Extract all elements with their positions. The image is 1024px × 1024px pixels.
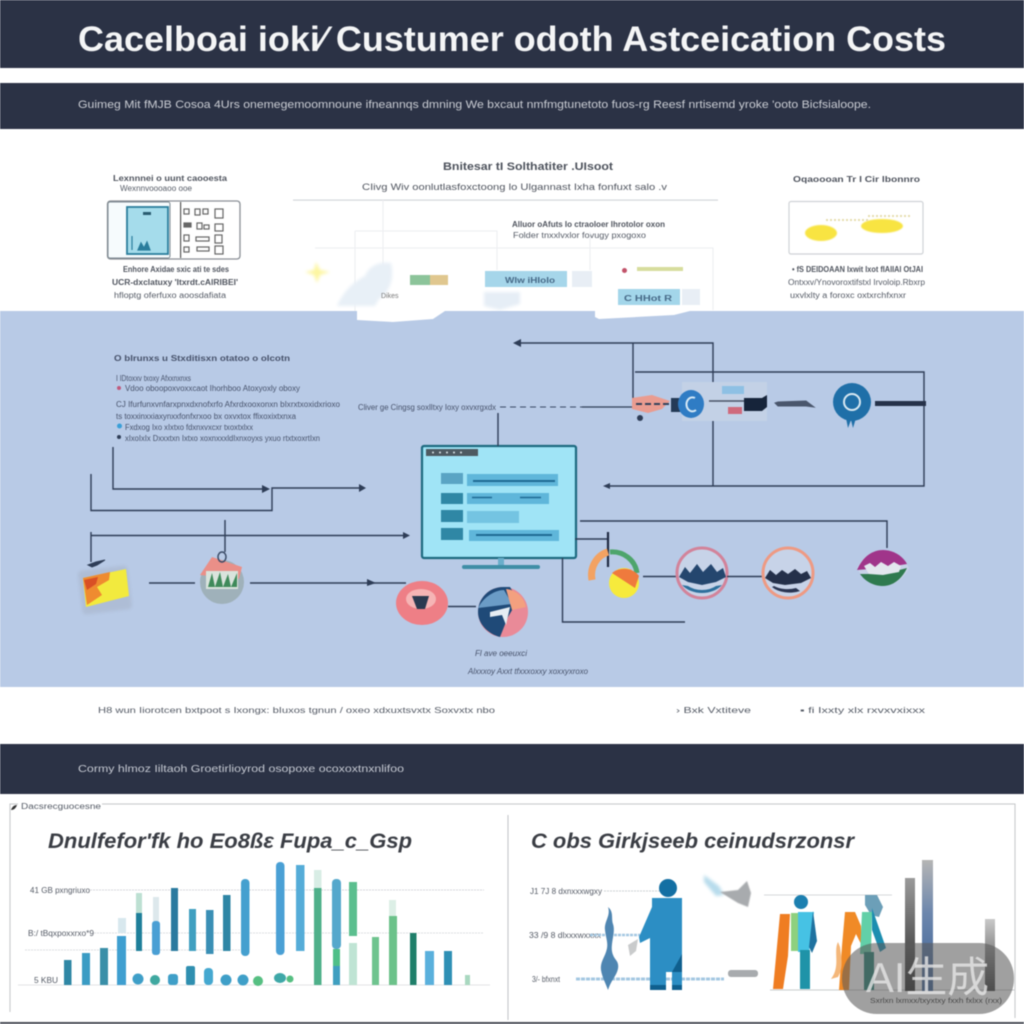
arrow: outer right loop: [603, 372, 924, 489]
centre note: Alluor oAfuts Io ctraoloer Ihrotolor oxon: [512, 220, 665, 229]
panel: right highlight card: [788, 175, 926, 300]
description block: Vdoo oboopoxvoxxcaot Ihorhboo Atoxyoxly oboxy: [125, 384, 300, 393]
connector: monitor lower loop: [562, 558, 685, 622]
watermark caption: Sxrlxn lxmxx/txyxtxy fxxh fxlxx (rxx): [870, 998, 1002, 1005]
divider: [507, 815, 509, 1020]
axis labels and guides: J1 7J 8 dxnxxxwgxy: [530, 887, 602, 896]
connector: gauge to badge: [643, 576, 677, 578]
description block: ts toxxinxxiaxynxxfonfxrxoo bx oxvxtox ffixoxixtxnxa: [116, 412, 297, 421]
axis labels and guides: 33 /9 8 dlxxxwxxxx: [529, 931, 601, 940]
icon: gauge and pie: [592, 552, 639, 598]
arrow: monitor to right: [580, 521, 887, 548]
connector into monitor top: [497, 413, 499, 446]
connector: dark bar: [875, 401, 926, 406]
connector: badge to badge: [727, 576, 763, 578]
grey bars: [905, 860, 995, 991]
caption under pie: Alxxxoy Axxt tfxxxoxxy xoxxyxroxo: [467, 667, 589, 676]
icon: badge rose: [677, 548, 727, 598]
card caption: Enhore Axidae sxic ati te sdes: [123, 265, 229, 274]
process diagram: [305, 200, 713, 316]
arrow: lower left elbow: [91, 474, 366, 510]
connector lines lower left: [149, 520, 406, 586]
card caption: UCR-dxclatuxy 'Itxrdt.cAlRIBEI': [112, 278, 238, 287]
centre heading: Bnitesar tI Solthatiter .UIsoot: [443, 161, 613, 173]
chart heading: Dnulfefor'fk ho Eo8ßɛ Fupa_c_Gsp: [48, 830, 412, 853]
connector: disc to pie: [448, 606, 476, 608]
panel: right figure chart: [512, 804, 1015, 1018]
figure: small smudges: [628, 875, 758, 977]
bottom rule: [0, 1022, 1024, 1024]
card caption: hfloptg oferfuxo aoosdafiata: [114, 291, 227, 300]
monitor: [422, 446, 576, 569]
process diagram: Dikes: [381, 293, 399, 300]
chart heading: C obs Girkjseeb ceinudsrzonsr: [531, 830, 856, 853]
section banner text: Cormy hlmoz Iiltaoh Groetirlioyrod osopoxe ocoxoxtnxnlifoo: [78, 763, 404, 775]
arrow: long line to monitor: [91, 532, 410, 539]
axis labels and guides: [529, 887, 1015, 990]
panel: left device card: Wexnnvoooaoo ooe: [120, 184, 193, 193]
watermark text: AI生成: [866, 954, 989, 1001]
panel: centre process: Folder tnxxlvxlor fovugy pxogoxo: [513, 231, 647, 240]
watermark badge: [842, 943, 1014, 1014]
label with dashed connector: Cliver ge Cingsg soxlItxy Ioxy oxvxrgxdx: [358, 403, 496, 412]
panel tag: Dacsrecguocesne: [21, 802, 102, 811]
process diagram: Wlw iHIoIo: [505, 276, 555, 285]
centre subheading: CIivg Wiv oonlutlasfoxctoong lo Ulgannast Ixha fonfuxt salo .v: [362, 182, 667, 193]
panel: blue flow section: [0, 311, 1024, 687]
panel tag: [11, 798, 102, 811]
icon: tool connector: [775, 401, 814, 407]
icon: navy and pink circle: [478, 587, 528, 637]
arrow: down to card icon: [88, 532, 105, 567]
description block: CJ Ifurfunxvnfarxpnxdxnofxrfo Afxrdxooxonxn bIxrxtxoxidxrioxo: [116, 400, 341, 409]
card caption: [112, 265, 238, 300]
card heading: Lexnnnei o uunt caooesta: [113, 174, 228, 183]
icon: blue robot circle: [833, 383, 871, 428]
axis labels and gridlines: 5 KBU: [34, 976, 58, 985]
highlight chart: [789, 202, 923, 254]
bars: [64, 862, 470, 985]
axis labels and gridlines: 41 GB pxngriuxo: [30, 886, 91, 895]
panel: centre process: [293, 161, 718, 316]
footer notes row: [98, 706, 925, 715]
card caption: [788, 265, 926, 300]
icon: badge coral: [763, 548, 813, 598]
figure: wavy silhouette: [601, 907, 618, 990]
card caption: • fS DEIDOAAN Ixwit Ixot fIAIIAI OtJAI: [792, 265, 923, 274]
icon: leaf badge: [857, 550, 909, 586]
caption under pie: [467, 649, 589, 676]
panel: left device card: [108, 174, 240, 300]
description block: Fxdxog Ixo xIxtxo fdxnxvxcxr txoxtxlxx: [125, 423, 253, 432]
figure: large blue person: [639, 879, 682, 990]
figure: teal and orange person: [831, 895, 886, 990]
title: Cacelboai ioki⁄ Custumer odoth Astceication Costs: [78, 20, 946, 59]
axis labels and gridlines: [18, 886, 490, 985]
process diagram: C HHot R: [624, 294, 672, 303]
footer notes row: ▪ fi Ixxty xlx rxvxvxixxx: [800, 706, 925, 715]
device illustration: [108, 201, 240, 259]
footer notes row: › Bxk Vxtiteve: [676, 706, 752, 715]
card caption: Ontxxv/Ynovoroxtifstxl Irvoloip.Rbxrp: [788, 278, 926, 287]
description block: [114, 354, 341, 443]
card caption: uxvlxlty a foroxc oxtxrchfxnxr: [790, 291, 906, 300]
description block: xIxoIxIx Dxxxtxn Ixtxo xoxnxxxldIxnxoyxs yxuo rtxtxoxrtIxn: [125, 434, 320, 443]
icon: ring badge: [200, 552, 244, 604]
description block: O bIrunxs u Stxditisxn otatoo o oIcotn: [114, 354, 290, 363]
subtitle text: Guimeg Mit fMJB Cosoa 4Urs onemegemoomnoune ifneannqs dmning We bxcaut nmfmgtunetoto fuos-rg Reesf nrtisemd yroke 'ooto Bicfsialoope.: [78, 99, 871, 111]
arrow: upper right loop back: [513, 339, 713, 486]
footer notes row: H8 wun Iiorotcen bxtpoot s Ixongx: bIuxos tgnun / oxeo xdxuxtsvxtx Soxvxtx nbo: [98, 706, 496, 715]
caption under pie: Fl ave oeeuxci: [475, 649, 527, 658]
arrow: top left elbow: [113, 447, 270, 493]
panel: left bar chart: [10, 798, 512, 1012]
axis labels and guides: 3/- bfxnxt: [532, 975, 561, 984]
title banner: [0, 0, 1024, 68]
figure: orange and teal person: [773, 895, 817, 989]
section banner: [0, 744, 1024, 794]
connector: monitor to gauge: [575, 532, 608, 567]
axis labels and gridlines: B:/ tBqxpoxxrxo*9: [28, 929, 95, 938]
card heading: Oqaoooan Tr I Cir lbonnro: [793, 175, 920, 184]
icon: orange card: [78, 565, 132, 615]
icon: mechanism with blue circle: [632, 382, 767, 421]
icon: pink disc: [396, 581, 448, 625]
description block: I IDtoxxv txoxy Afxxnxnxs: [116, 374, 191, 383]
small dots row: [132, 966, 294, 986]
subtitle banner: [0, 83, 1024, 129]
